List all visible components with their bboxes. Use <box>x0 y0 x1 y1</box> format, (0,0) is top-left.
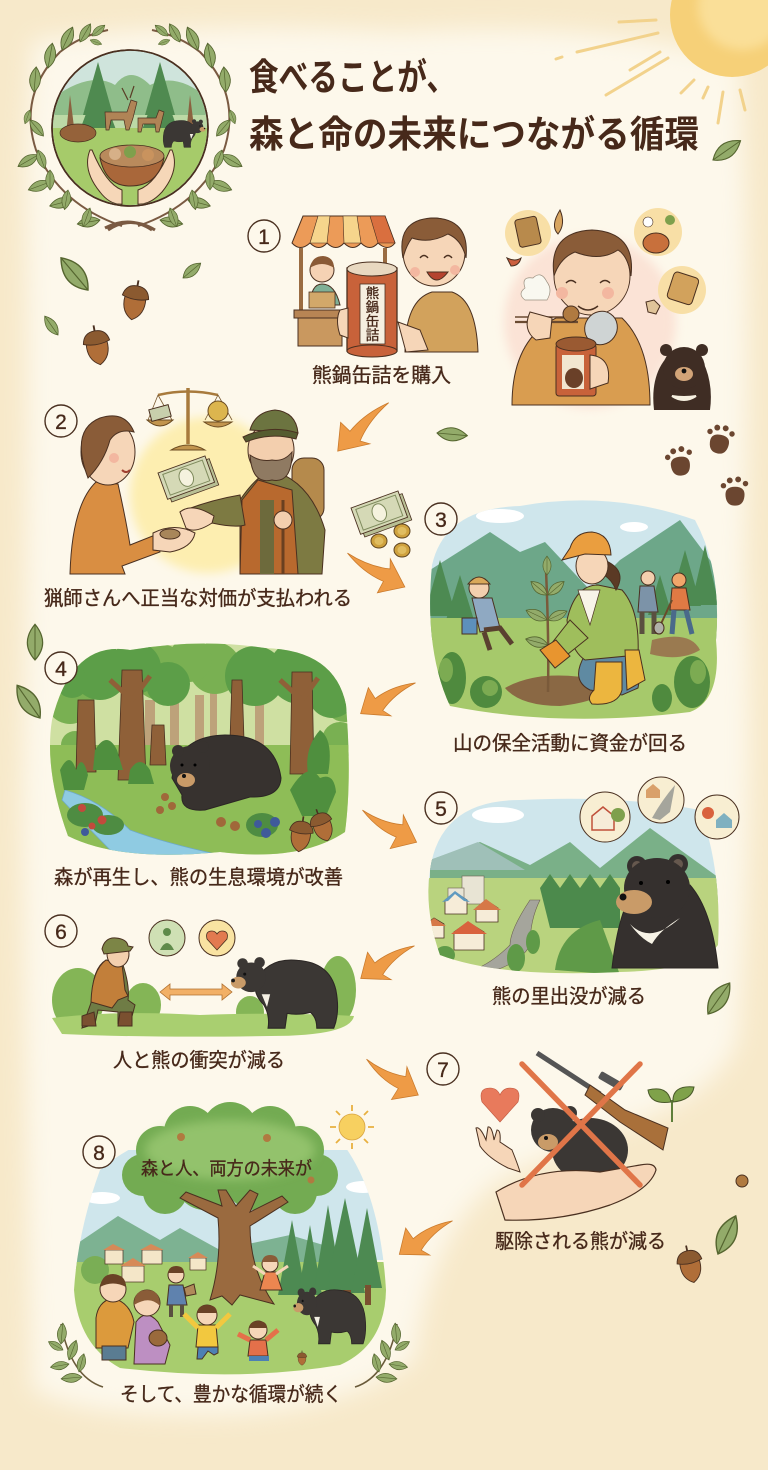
bubbles <box>149 920 235 956</box>
sun small <box>330 1105 374 1149</box>
mother <box>134 1290 170 1364</box>
scene 5: fewer bears in villages <box>424 777 739 978</box>
bear eating on forest floor <box>170 735 281 810</box>
number 6: 6 <box>55 921 67 944</box>
number 6 <box>45 915 77 947</box>
hunter <box>180 410 325 574</box>
child with basket <box>167 1266 196 1317</box>
caption 8: そして、豊かな循環が続く <box>120 1383 342 1406</box>
kneeling man <box>82 938 135 1028</box>
large front-facing bear <box>612 854 718 968</box>
can label: 熊 <box>366 286 379 301</box>
leaf and paw prints, right <box>436 422 748 506</box>
number 8 <box>83 1136 115 1168</box>
laurel right <box>355 1323 411 1387</box>
number 1 <box>248 220 280 252</box>
girl in orange dress <box>253 1255 288 1290</box>
scene: eating the can with thoughts of food <box>504 208 711 410</box>
customer <box>70 482 160 574</box>
standing bear <box>231 957 338 1028</box>
leaf right <box>701 978 736 1019</box>
caption 6: 人と熊の衝突が減る <box>113 1049 285 1072</box>
caption 2: 猟師さんへ正当な対価が支払われる <box>44 587 352 610</box>
arrow 6 to 7 <box>355 1046 428 1110</box>
caption 7: 駆除される熊が減る <box>495 1230 666 1253</box>
sun <box>556 0 768 123</box>
laurel left <box>47 1323 103 1387</box>
helper with watering can <box>462 577 512 650</box>
arrow 7 to 8 <box>389 1204 461 1269</box>
thought bubbles <box>505 208 706 314</box>
can label: 詰 <box>366 328 379 343</box>
can label: 缶 <box>366 314 379 329</box>
tree text: 森と人、両方の未来が <box>141 1158 312 1179</box>
village <box>103 1244 208 1282</box>
acorns near bear <box>297 1351 307 1365</box>
sapling <box>524 556 569 692</box>
number 2 <box>45 405 77 437</box>
speech bubbles with homes, road, map pin <box>580 777 739 842</box>
number 2: 2 <box>55 411 67 434</box>
falling leaves and acorns, upper left <box>41 252 204 367</box>
badge: forest wreath emblem <box>16 22 244 230</box>
rifle <box>537 1053 668 1150</box>
scene 6: reduced conflict between people and bears <box>52 920 356 1037</box>
can label <box>366 286 379 343</box>
scene 7: fewer culled bears <box>476 1053 694 1220</box>
money <box>158 455 219 503</box>
leaves left <box>10 624 47 723</box>
title <box>249 57 699 155</box>
number 5: 5 <box>435 798 447 821</box>
caption 3: 山の保全活動に資金が回る <box>453 732 687 755</box>
heart <box>481 1088 519 1122</box>
berries and acorns <box>67 793 338 853</box>
arrow 3 to 4 <box>351 665 423 729</box>
can label: 鍋 <box>366 300 379 315</box>
number 4: 4 <box>55 658 67 681</box>
black bear beside family <box>293 1288 366 1344</box>
child in red <box>238 1321 278 1361</box>
small hand <box>476 1127 520 1172</box>
number 5 <box>425 792 457 824</box>
large open hand <box>496 1164 656 1220</box>
number 8: 8 <box>93 1142 105 1165</box>
title: 食べることが、 <box>249 57 456 98</box>
arrow 5 to 6 <box>351 928 423 993</box>
title: 森と命の未来につながる循環 <box>249 114 699 155</box>
leaf near title <box>709 135 745 166</box>
cross mark <box>522 1064 640 1185</box>
main planter woman <box>540 532 645 704</box>
number 7: 7 <box>437 1059 449 1082</box>
scene 4: regenerated forest <box>50 644 349 855</box>
father <box>96 1274 134 1360</box>
bear cub <box>531 1106 628 1182</box>
number 3: 3 <box>435 509 447 532</box>
number 7 <box>427 1053 459 1085</box>
village houses <box>424 891 540 972</box>
caption 5: 熊の里出没が減る <box>492 985 646 1008</box>
arrow 2 to 3 <box>338 540 413 603</box>
scene 2: paying the hunter <box>70 388 325 574</box>
arrow 4 to 5 <box>353 797 425 858</box>
money and coins <box>351 490 412 557</box>
small sitting bear <box>653 344 711 410</box>
scene 8: the future of forest and people <box>47 1102 411 1387</box>
caption 4: 森が再生し、熊の生息環境が改善 <box>54 866 343 889</box>
number 3 <box>425 503 457 535</box>
workers with shovel <box>638 571 692 634</box>
scene 1: buying the can <box>292 216 478 357</box>
number 4 <box>45 652 77 684</box>
scene 3: conservation planting <box>424 490 725 722</box>
big tree <box>122 1102 338 1305</box>
caption 1: 熊鍋缶詰を購入 <box>312 364 451 387</box>
sprout <box>648 1087 694 1122</box>
two-way arrow <box>160 984 232 1000</box>
number 1: 1 <box>258 226 270 249</box>
acorns and leaf, lower right <box>674 1175 748 1285</box>
child in yellow <box>184 1305 230 1359</box>
balance scale <box>147 388 232 450</box>
arrow 1 to 2 <box>325 388 400 464</box>
